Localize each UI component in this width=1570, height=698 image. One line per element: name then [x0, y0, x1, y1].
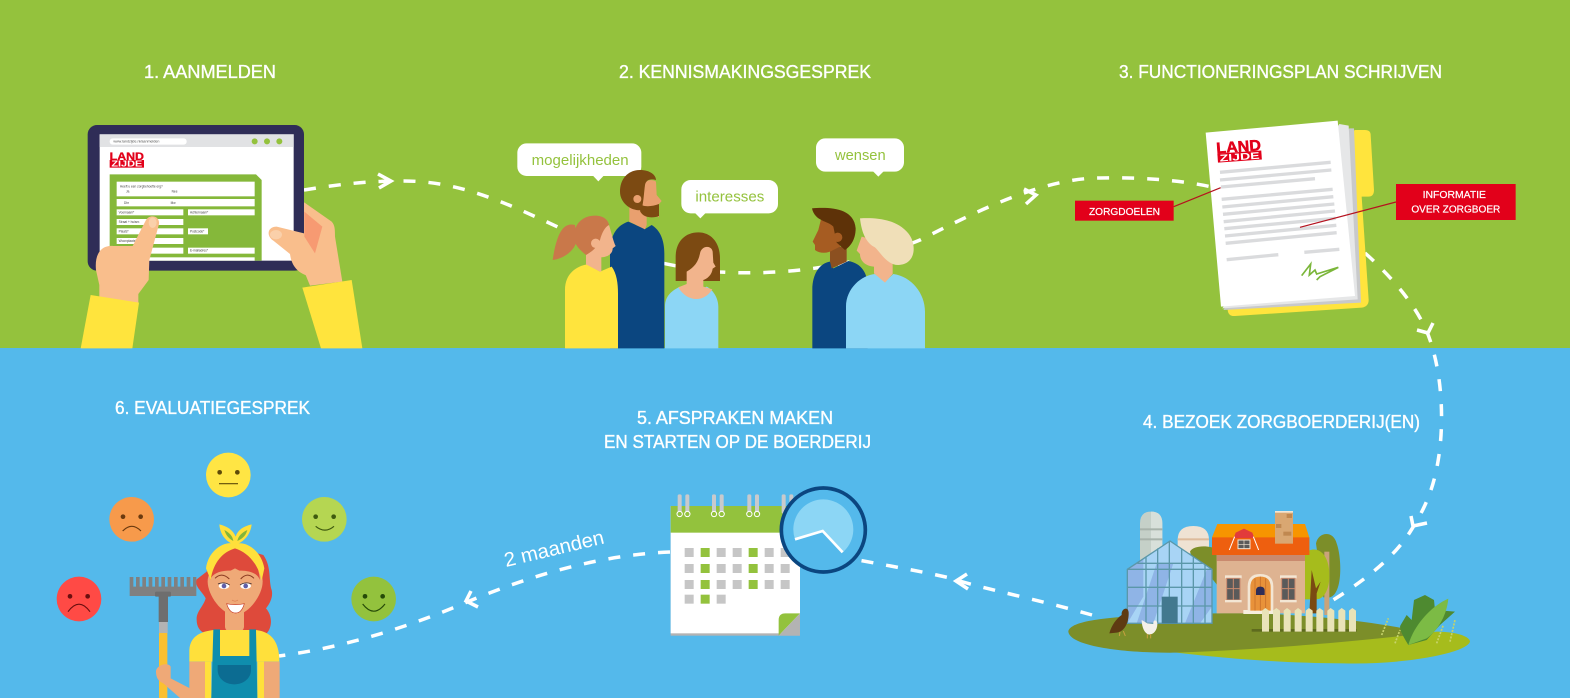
registration form: Voornaam*: [119, 210, 135, 214]
landzijde logo: LAND: [1216, 137, 1262, 157]
man with beard: [610, 170, 664, 348]
arrowhead 5: [956, 574, 968, 589]
text: 2 maanden: 2 maanden: [502, 527, 606, 572]
heading 1: 1. AANMELDEN: [144, 62, 276, 82]
bubble: wensen: [816, 138, 904, 177]
bubble: interesses: interesses: [695, 190, 764, 206]
registration form: Nee: [172, 190, 178, 194]
girl with bob: [665, 232, 720, 348]
older woman: [846, 218, 925, 348]
left hand: [96, 216, 159, 305]
tablet screen: ZIJDE: [111, 159, 143, 169]
page fold: [779, 613, 800, 636]
brown chicken: [1109, 609, 1129, 636]
tablet frame: [88, 125, 304, 271]
heading 5: [604, 408, 871, 452]
main sheet: [1206, 121, 1355, 307]
arrowhead 4: [1411, 516, 1427, 526]
callout: informatie over zorgboer: OVER ZORGBOER: [1411, 205, 1500, 216]
smiley: happy: [302, 497, 347, 542]
tablet screen: LAND: [110, 151, 144, 163]
bubble: mogelijkheden: [517, 143, 641, 181]
trees: [1304, 534, 1340, 615]
registration form: Mw: [171, 201, 176, 205]
calendar day grid: [685, 548, 790, 604]
calendar sheet: [671, 506, 800, 636]
registration form: Achternaam*: [190, 210, 209, 214]
arrowhead 1: [378, 174, 391, 188]
illustration: care farm: [1068, 511, 1470, 663]
right hand back: [293, 201, 342, 286]
landzijde logo: ZIJDE: [1219, 151, 1261, 164]
callout: zorgdoelen: [1075, 188, 1221, 221]
illustration: tablet with hands: [81, 125, 362, 348]
callout: zorgdoelen: ZORGDOELEN: [1089, 207, 1160, 218]
heading 4: 4. BEZOEK ZORGBOERDERIJ(EN): [1143, 412, 1420, 432]
registration form: Woonplaats*: [119, 239, 137, 243]
back sheets: [1222, 124, 1361, 310]
bubble: mogelijkheden: mogelijkheden: [532, 153, 629, 169]
heading 6: 6. EVALUATIEGESPREK: [115, 398, 310, 418]
farmhouse: [1212, 511, 1309, 614]
rake: [130, 577, 196, 698]
right sleeve: [302, 280, 362, 348]
registration form: Dhr: [124, 201, 129, 205]
tablet screen: [100, 134, 294, 261]
smiley: unhappy: [109, 497, 154, 542]
registration form: [110, 174, 262, 261]
silos: [1140, 512, 1209, 562]
bush behind house: [1190, 546, 1218, 587]
arrowhead 6: [466, 591, 478, 607]
smiley: very unhappy: [57, 577, 101, 621]
greenhouse: [1127, 541, 1212, 623]
registration form: E-mailadres*: [190, 249, 209, 253]
right hand thumb: [269, 212, 323, 277]
heading 5: 5. AFSPRAKEN MAKEN: [637, 408, 833, 428]
registration form: Postcode*: [190, 229, 205, 233]
heading 2: 2. KENNISMAKINGSGESPREK: [619, 62, 871, 82]
landzijde logo: [1216, 137, 1262, 165]
dashed route arrows: [279, 174, 1442, 656]
ground: [1068, 613, 1470, 663]
bubble: wensen: wensen: [834, 148, 886, 164]
callout: informatie over zorgboer: INFORMATIE: [1423, 190, 1486, 201]
registration form: Heeft u een zorgbehoefte erg?: [120, 184, 163, 188]
yellow folder: [1220, 130, 1374, 316]
arrowhead 3: [1417, 323, 1433, 333]
registration form: Straat + huisnr.: [119, 220, 140, 224]
smiley: neutral: [206, 453, 251, 497]
registration form: Ja: [126, 190, 130, 194]
tablet screen: www.landzijde.nl/aanmelden: [113, 140, 159, 144]
bubble: interesses: [681, 180, 778, 218]
man in blue: [812, 208, 868, 348]
plant: [1382, 595, 1455, 645]
fence: [1252, 608, 1357, 632]
illustration: farmer with smileys: [57, 453, 396, 698]
signature: [1302, 264, 1338, 280]
heading 5: EN STARTEN OP DE BOERDERIJ: [604, 432, 871, 452]
text lines: [1220, 162, 1339, 260]
heading 3: 3. FUNCTIONERINGSPLAN SCHRIJVEN: [1119, 62, 1442, 82]
woman with ponytail: [553, 216, 618, 348]
smiley: very happy: [351, 577, 396, 621]
arrowhead 2: [1024, 189, 1036, 204]
callout: informatie over zorgboer: [1300, 184, 1516, 227]
calendar rings: [677, 494, 793, 517]
clock: [781, 488, 865, 572]
left sleeve: [81, 295, 139, 348]
illustration: people with speech bubbles: [517, 138, 925, 348]
white chicken: [1142, 620, 1157, 638]
registration form: Plaats*: [119, 229, 129, 233]
farmer woman: [156, 524, 280, 698]
illustration: calendar with clock: [671, 488, 865, 636]
illustration: functioning plan document: [1075, 121, 1516, 316]
